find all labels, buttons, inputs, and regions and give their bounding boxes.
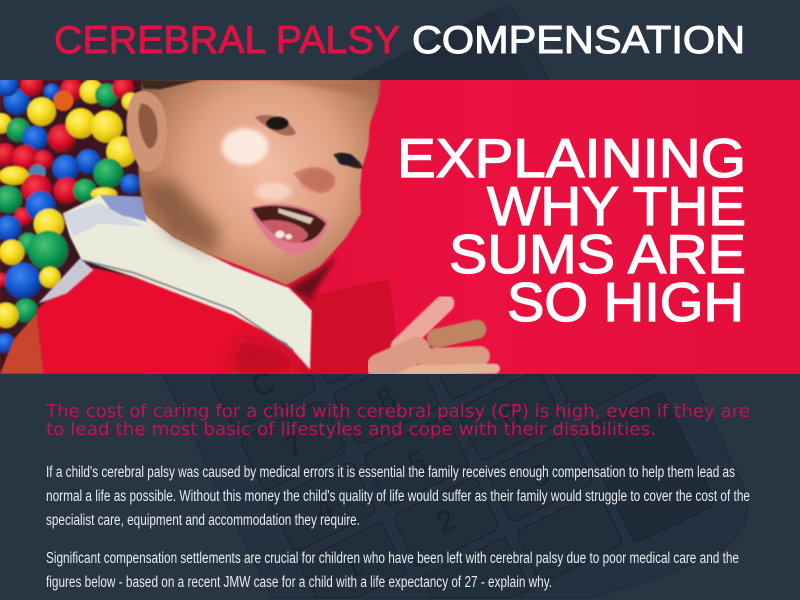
body paragraph 2 (46, 550, 739, 591)
background watermark: calculator: 6 (496, 399, 526, 436)
chin shadow (290, 257, 337, 300)
body paragraph 1: specialist care, equipment and accommodation they require. (46, 512, 360, 529)
background watermark: calculator: 2 (431, 503, 461, 540)
nose (293, 167, 335, 193)
background watermark: calculator: 4 (309, 490, 339, 527)
background watermark: calculator: 7 (279, 428, 309, 465)
red pillow (0, 80, 800, 374)
hero headline: WHY THE (487, 175, 746, 237)
child's red shirt (0, 265, 300, 374)
hero photo panel (0, 73, 800, 374)
title: CEREBRAL PALSY (54, 19, 400, 62)
background watermark: calculator: 8 (372, 381, 401, 418)
laughing mouth (250, 204, 328, 255)
ball pit (0, 73, 143, 374)
cheek highlight (222, 128, 268, 165)
title (54, 19, 745, 62)
title: COMPENSATION (412, 19, 745, 62)
body paragraph 2: figures below - based on a recent JMW case for a child with a life expectancy of 27 - explain why. (46, 574, 552, 591)
intro statement: to lead the most basic of lifestyles and cope with their disabilities. (46, 420, 656, 440)
hero headline: SUMS ARE (449, 223, 746, 285)
child's head (126, 80, 380, 300)
background watermark: calculator: C (247, 365, 281, 404)
intro statement: The cost of caring for a child with cerebral palsy (CP) is high, even if they are (45, 402, 750, 422)
child's collar (38, 195, 312, 369)
background watermark: calculator: 5 (403, 445, 432, 482)
body paragraph 1 (46, 464, 750, 529)
child's hand (380, 303, 495, 371)
background watermark: calculator: 1 (338, 549, 367, 586)
hero headline (397, 127, 746, 333)
eyes (255, 115, 363, 168)
ear (126, 91, 167, 172)
hero headline: SO HIGH (507, 271, 744, 333)
background watermark: calculator: 3 (525, 458, 554, 495)
intro statement (45, 402, 750, 440)
hero headline: EXPLAINING (397, 127, 746, 189)
